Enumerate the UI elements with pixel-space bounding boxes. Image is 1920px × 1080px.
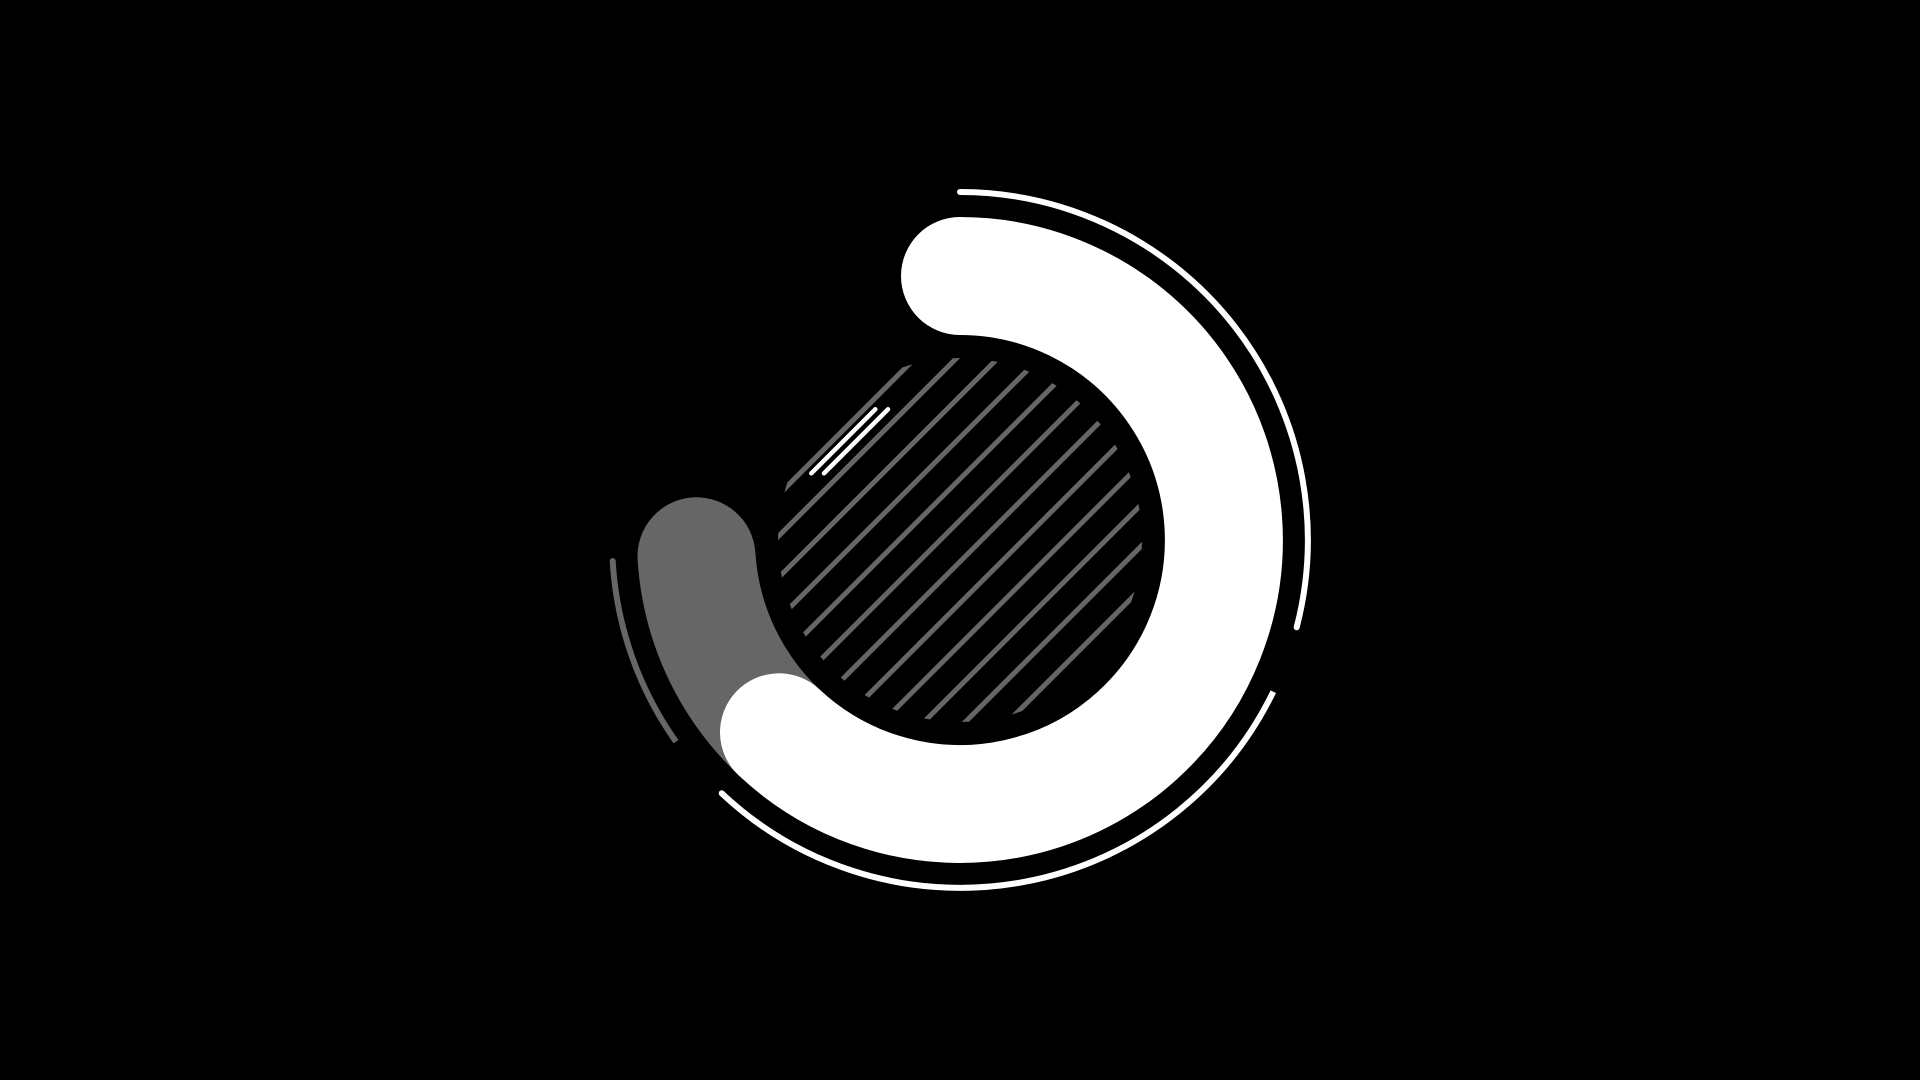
outer white arc end cap [719, 790, 725, 796]
hatched circle [778, 358, 1142, 722]
grey arc segment [696, 556, 850, 780]
outer grey arc: left [613, 561, 676, 742]
white main ring [779, 276, 1224, 804]
outer grey arc end cap [610, 558, 616, 564]
outer white arc: upper right [960, 192, 1308, 627]
white accent lines [811, 409, 888, 473]
outer white arc: bottom [722, 692, 1273, 888]
